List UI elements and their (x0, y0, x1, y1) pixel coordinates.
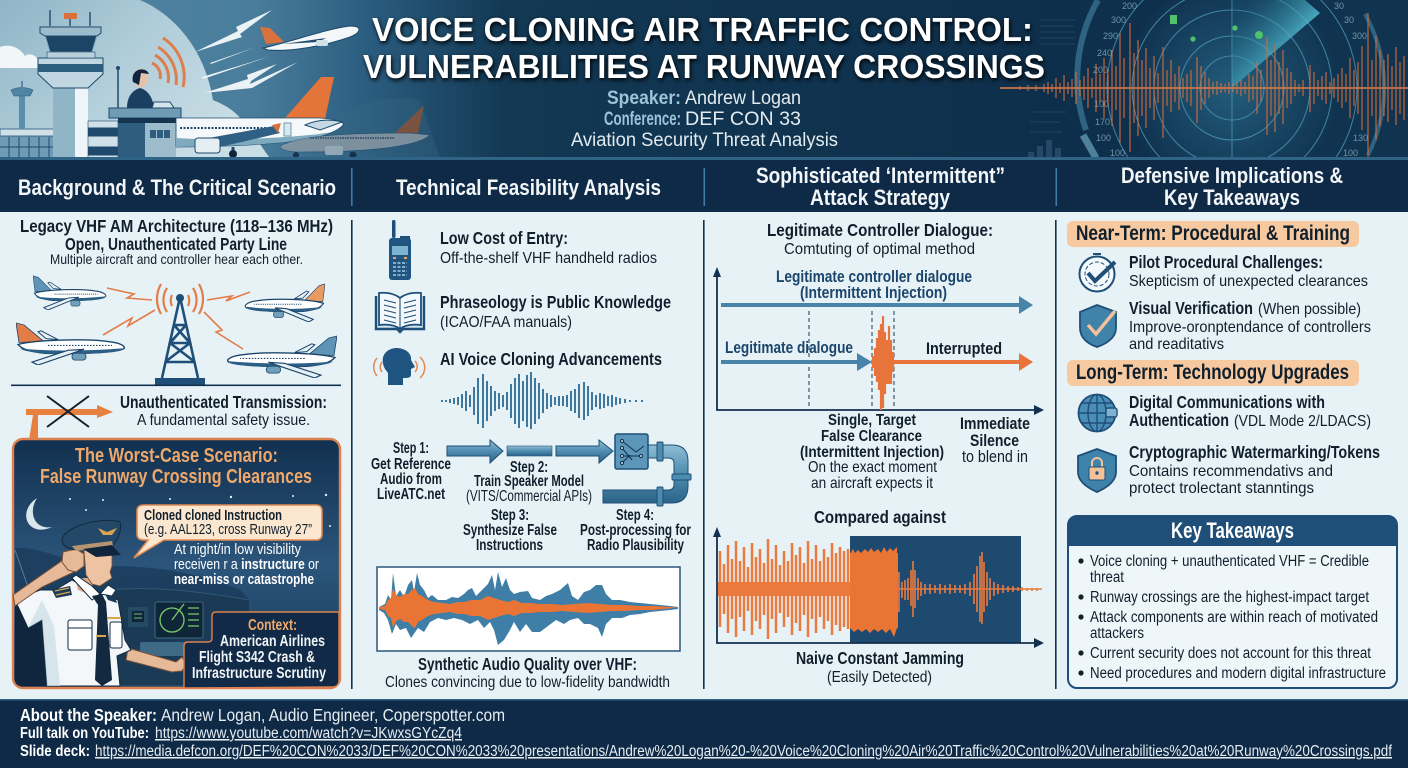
step 2 text (466, 459, 592, 505)
about the speaker: About the Speaker: (20, 705, 157, 725)
illustration: radar with waveform: 240 (1097, 48, 1112, 58)
about the speaker: Andrew Logan, Audio Engineer, Coperspotter.com (161, 705, 505, 725)
panel: attack strategy (713, 220, 1044, 686)
illustration: radar with waveform: 300 (1111, 15, 1126, 25)
digital communications text: Digital Communications with (1129, 392, 1325, 412)
step 1 text: LiveATC.net (377, 486, 445, 503)
takeaway list (1090, 553, 1386, 682)
synthetic audio caption: Clones convincing due to low-fidelity bandwidth (385, 674, 670, 691)
pipeline diagram (447, 434, 691, 506)
heading: defensive implications: Defensive Implications & (1121, 163, 1343, 188)
single target annotation (800, 412, 944, 492)
worst case heading (40, 445, 312, 488)
risk description text (174, 542, 319, 588)
label: legitimate controller dialogue: (Intermittent Injection) (800, 283, 947, 302)
arrow: interrupted (893, 353, 1033, 371)
section header band (0, 157, 1408, 212)
illustration: radar with waveform: 100 (1094, 99, 1109, 109)
key takeaways heading: Key Takeaways (1171, 518, 1294, 543)
heading: background: Background & The Critical Scenario (18, 175, 336, 200)
synthetic audio caption (385, 654, 670, 691)
speech bubble: cloned instruction: Cloned cloned Instruction (144, 508, 282, 524)
heading: attack strategy (756, 163, 1005, 210)
step 3 text: Instructions (476, 537, 543, 554)
youtube link: Full talk on YouTube: (20, 725, 149, 742)
illustration: radar with waveform: 200 (1093, 65, 1108, 75)
heading: technical feasibility: Technical Feasibility Analysis (396, 175, 661, 200)
digital communications text: Authentication (1129, 410, 1229, 430)
step 4 text (580, 507, 691, 554)
unauthenticated transmission text (120, 392, 327, 429)
chart: synthetic audio waveform (377, 567, 680, 651)
icon: crossed out transmission arrow (26, 396, 113, 440)
dialogue heading (767, 220, 993, 258)
title: VOICE CLONING AIR TRAFFIC CONTROL: (372, 11, 1033, 48)
context callout: Flight S342 Crash & (199, 649, 315, 666)
synthetic audio caption: Synthetic Audio Quality over VHF: (418, 654, 637, 674)
context callout: Infrastructure Scrutiny (192, 665, 326, 682)
illustration: radar with waveform: 290 (1103, 31, 1118, 41)
chart: constant jamming (713, 527, 1044, 648)
illustration: radar with waveform: 100 (1343, 148, 1358, 158)
illustration: radar with waveform: 170 (1095, 117, 1110, 127)
illustration: radar with waveform: 100 (1110, 148, 1125, 158)
footer (0, 699, 1408, 768)
voice waveform (442, 372, 642, 429)
step 1 text: Step 1: (393, 440, 429, 457)
label: legitimate controller dialogue (776, 267, 972, 302)
step 4 text: Step 4: (616, 507, 654, 524)
plane: distant parked (280, 105, 430, 158)
panel: background and critical scenario (11, 216, 341, 688)
risk description text: near-miss or catastrophe (174, 572, 314, 588)
speech bubble: cloned instruction: (e.g. AAL123, cross Runway 27” (144, 522, 312, 538)
speaker and conference details: Speaker: (607, 88, 681, 109)
AI voice cloning text: AI Voice Cloning Advancements (440, 349, 662, 369)
plane: flying (260, 26, 359, 50)
context callout (184, 612, 339, 688)
single target annotation: (Intermittent Injection) (800, 444, 944, 461)
diagram: party line radio network (16, 276, 337, 385)
pilot illustration (13, 520, 250, 686)
VHF architecture text: Legacy VHF AM Architecture (118–136 MHz) (20, 216, 333, 236)
illustration: radar with waveform (1000, 0, 1408, 157)
takeaway list: Runway crossings are the highest-impact target (1090, 589, 1370, 606)
step 2 text: Step 2: (510, 459, 548, 476)
bullets (1078, 558, 1084, 676)
speech bubble: cloned instruction (134, 505, 322, 558)
VHF architecture text: Open, Unauthenticated Party Line (65, 234, 287, 254)
speaker and conference details: Conference: (604, 109, 681, 130)
youtube link: https://www.youtube.com/watch?v=JKwxsGYcZq4 (155, 725, 462, 742)
illustration: radar with waveform: 30 (1334, 1, 1344, 11)
unauthenticated transmission text: Unauthenticated Transmission: (120, 392, 327, 412)
digital communications text: (VDL Mode 2/LDACS) (1234, 413, 1371, 430)
panel: technical feasibility (371, 220, 691, 691)
icon: handheld radio (389, 220, 411, 280)
single target annotation: Single, Target (828, 412, 917, 429)
VHF architecture text: Multiple aircraft and controller hear each other. (50, 251, 303, 267)
visual verification text (1129, 298, 1371, 353)
plane: large parked (176, 77, 343, 158)
visual verification text: Improve-oronptendance of controllers (1129, 319, 1371, 336)
worst case heading: The Worst-Case Scenario: (75, 445, 278, 467)
step 2 text: (VITS/Commercial APIs) (466, 488, 592, 505)
arrow: legitimate controller dialogue (721, 296, 1033, 314)
cryptographic watermarking text (1129, 442, 1380, 497)
low cost text: Off-the-shelf VHF handheld radios (440, 250, 657, 267)
VHF architecture text (20, 216, 333, 267)
arrow: legitimate dialogue (721, 353, 872, 371)
header banner (0, 0, 1408, 157)
icon: shield lock (1078, 449, 1116, 492)
jamming caption (796, 648, 964, 686)
illustration: radar with waveform: 200 (1122, 1, 1137, 11)
pilot procedural text (1129, 252, 1368, 290)
night sky (15, 494, 331, 686)
worst case heading: False Runway Crossing Clearances (40, 466, 312, 488)
illustration: airport and planes (0, 0, 440, 158)
slide deck link: Slide deck: (20, 743, 90, 760)
false clearance burst (873, 316, 893, 410)
context callout: Context: (248, 617, 297, 634)
illustration: radar with waveform: 100 (1096, 133, 1111, 143)
label: interrupted: Interrupted (926, 339, 1002, 358)
step 3 text: Synthesize False (463, 522, 557, 539)
jamming caption: (Easily Detected) (827, 669, 932, 686)
dialogue heading: Legitimate Controller Dialogue: (767, 220, 993, 240)
immediate silence annotation: Silence (970, 432, 1019, 450)
jamming caption: Naive Constant Jamming (796, 648, 964, 668)
low cost text: Low Cost of Entry: (440, 228, 568, 248)
step 3 text (463, 507, 557, 554)
low cost text (440, 228, 657, 267)
visual verification text: (When possible) (1258, 301, 1361, 318)
cryptographic watermarking text: protect trolectant stanntings (1129, 480, 1314, 497)
heading: defensive implications: Key Takeaways (1164, 185, 1300, 210)
phraseology text: (ICAO/FAA manuals) (440, 314, 572, 331)
youtube link (20, 725, 462, 742)
panel: key takeaways (1068, 516, 1397, 688)
speaker and conference details: Andrew Logan (685, 88, 801, 109)
step 3 text: Step 3: (491, 507, 529, 524)
column dividers (351, 220, 1057, 689)
icon: speaking head (374, 348, 425, 385)
about the speaker (20, 705, 505, 725)
pilot procedural text: Skepticism of unexpected clearances (1129, 273, 1368, 290)
speaker and conference details (571, 88, 838, 151)
risk description text: At night/in low visibility (174, 542, 302, 558)
digital communications text (1129, 392, 1371, 430)
context callout: American Airlines (220, 633, 325, 650)
heading: attack strategy: Attack Strategy (810, 185, 951, 210)
compared against heading: Compared against (814, 507, 946, 527)
icon: shield check (1080, 305, 1116, 347)
panel: worst case scenario (13, 439, 340, 688)
panel: defensive implications (1067, 221, 1397, 688)
single target annotation: False Clearance (821, 428, 922, 445)
immediate silence annotation: Immediate (960, 415, 1030, 433)
takeaway list: Current security does not account for this threat (1090, 645, 1372, 662)
title: VULNERABILITIES AT RUNWAY CROSSINGS (363, 48, 1045, 85)
speaker and conference details: DEF CON 33 (685, 109, 801, 130)
phraseology text (440, 292, 671, 331)
label: legitimate dialogue: Legitimate dialogue (725, 338, 853, 357)
icon: globe (1078, 394, 1117, 432)
takeaway list: threat (1090, 569, 1125, 586)
illustration: radar with waveform: 30 (1344, 15, 1354, 25)
title (363, 11, 1045, 85)
cryptographic watermarking text: Contains recommendativs and (1129, 463, 1333, 480)
step 1 text: Audio from (380, 471, 442, 488)
step 4 text: Post-processing for (580, 522, 691, 539)
single target annotation: an aircraft expects it (811, 475, 933, 492)
takeaway list: attackers (1090, 625, 1144, 642)
label: legitimate controller dialogue: Legitimate controller dialogue (776, 267, 972, 286)
heading: attack strategy: Sophisticated ‘Intermittent” (756, 163, 1005, 188)
illustration: radar with waveform: 300 (1352, 31, 1367, 41)
pilot procedural text: Pilot Procedural Challenges: (1129, 252, 1323, 272)
unauthenticated transmission text: A fundamental safety issue. (137, 412, 310, 429)
immediate silence annotation (960, 415, 1030, 466)
icon: open book (376, 293, 424, 332)
step 1 text (371, 440, 451, 503)
immediate silence annotation: to blend in (962, 448, 1028, 466)
speaker and conference details: Aviation Security Threat Analysis (571, 130, 838, 151)
step 4 text: Radio Plausibility (587, 537, 684, 554)
heading: long-term: Long-Term: Technology Upgrades (1076, 361, 1349, 384)
illustration: radar with waveform: 130 (1353, 133, 1368, 143)
icon: stopwatch check (1080, 254, 1115, 292)
dialogue heading: Comtuting of optimal method (784, 241, 975, 258)
chart: intermittent injection timeline (713, 267, 1044, 415)
heading: defensive implications (1121, 163, 1343, 210)
step 2 text: Train Speaker Model (474, 473, 584, 490)
single target annotation: On the exact moment (808, 459, 937, 476)
heading: near-term: Near-Term: Procedural & Training (1076, 222, 1350, 245)
phraseology text: Phraseology is Public Knowledge (440, 292, 671, 312)
step 1 text: Get Reference (371, 456, 451, 473)
visual verification text: Visual Verification (1129, 298, 1253, 318)
risk description text: receiven r a instructure or (174, 557, 319, 573)
visual verification text: and readitativs (1129, 336, 1224, 353)
